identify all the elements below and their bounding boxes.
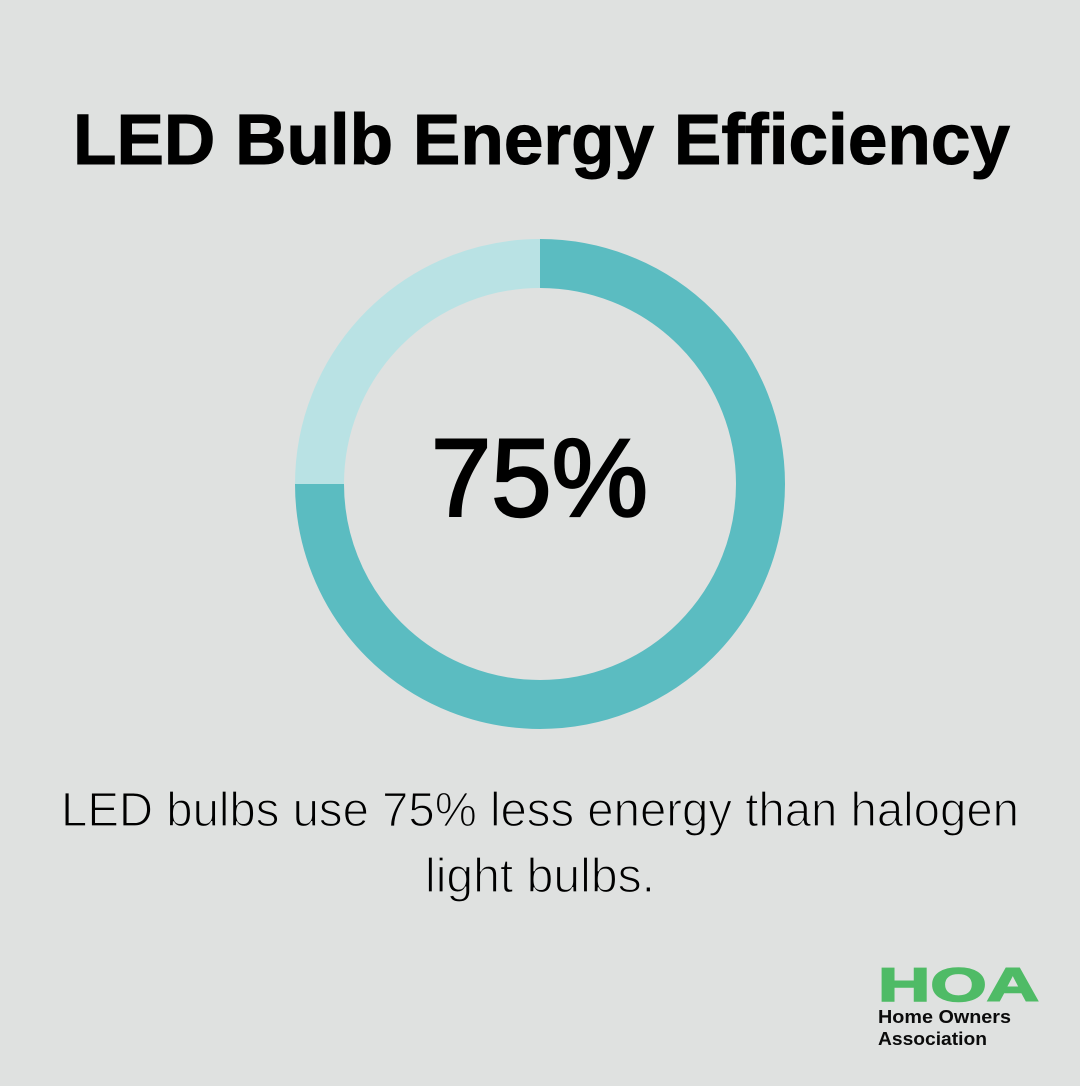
logo name: Association bbox=[878, 1029, 987, 1049]
logo name: Home Owners bbox=[878, 1007, 1011, 1027]
highlighted 75% segment bbox=[320, 264, 760, 704]
title: LED Bulb Energy Efficiency bbox=[73, 101, 1011, 180]
description: light bulbs. bbox=[425, 850, 655, 903]
logo mark HOA: HOA bbox=[878, 958, 1039, 1011]
description: LED bulbs use 75% less energy than halogen bbox=[61, 784, 1019, 837]
donut chart bbox=[320, 264, 760, 704]
logo name bbox=[878, 1007, 1011, 1049]
description bbox=[61, 784, 1019, 903]
remaining 25% segment bbox=[320, 264, 540, 484]
center value: 75% bbox=[431, 417, 648, 540]
logo: Home Owners Association bbox=[878, 958, 1039, 1049]
